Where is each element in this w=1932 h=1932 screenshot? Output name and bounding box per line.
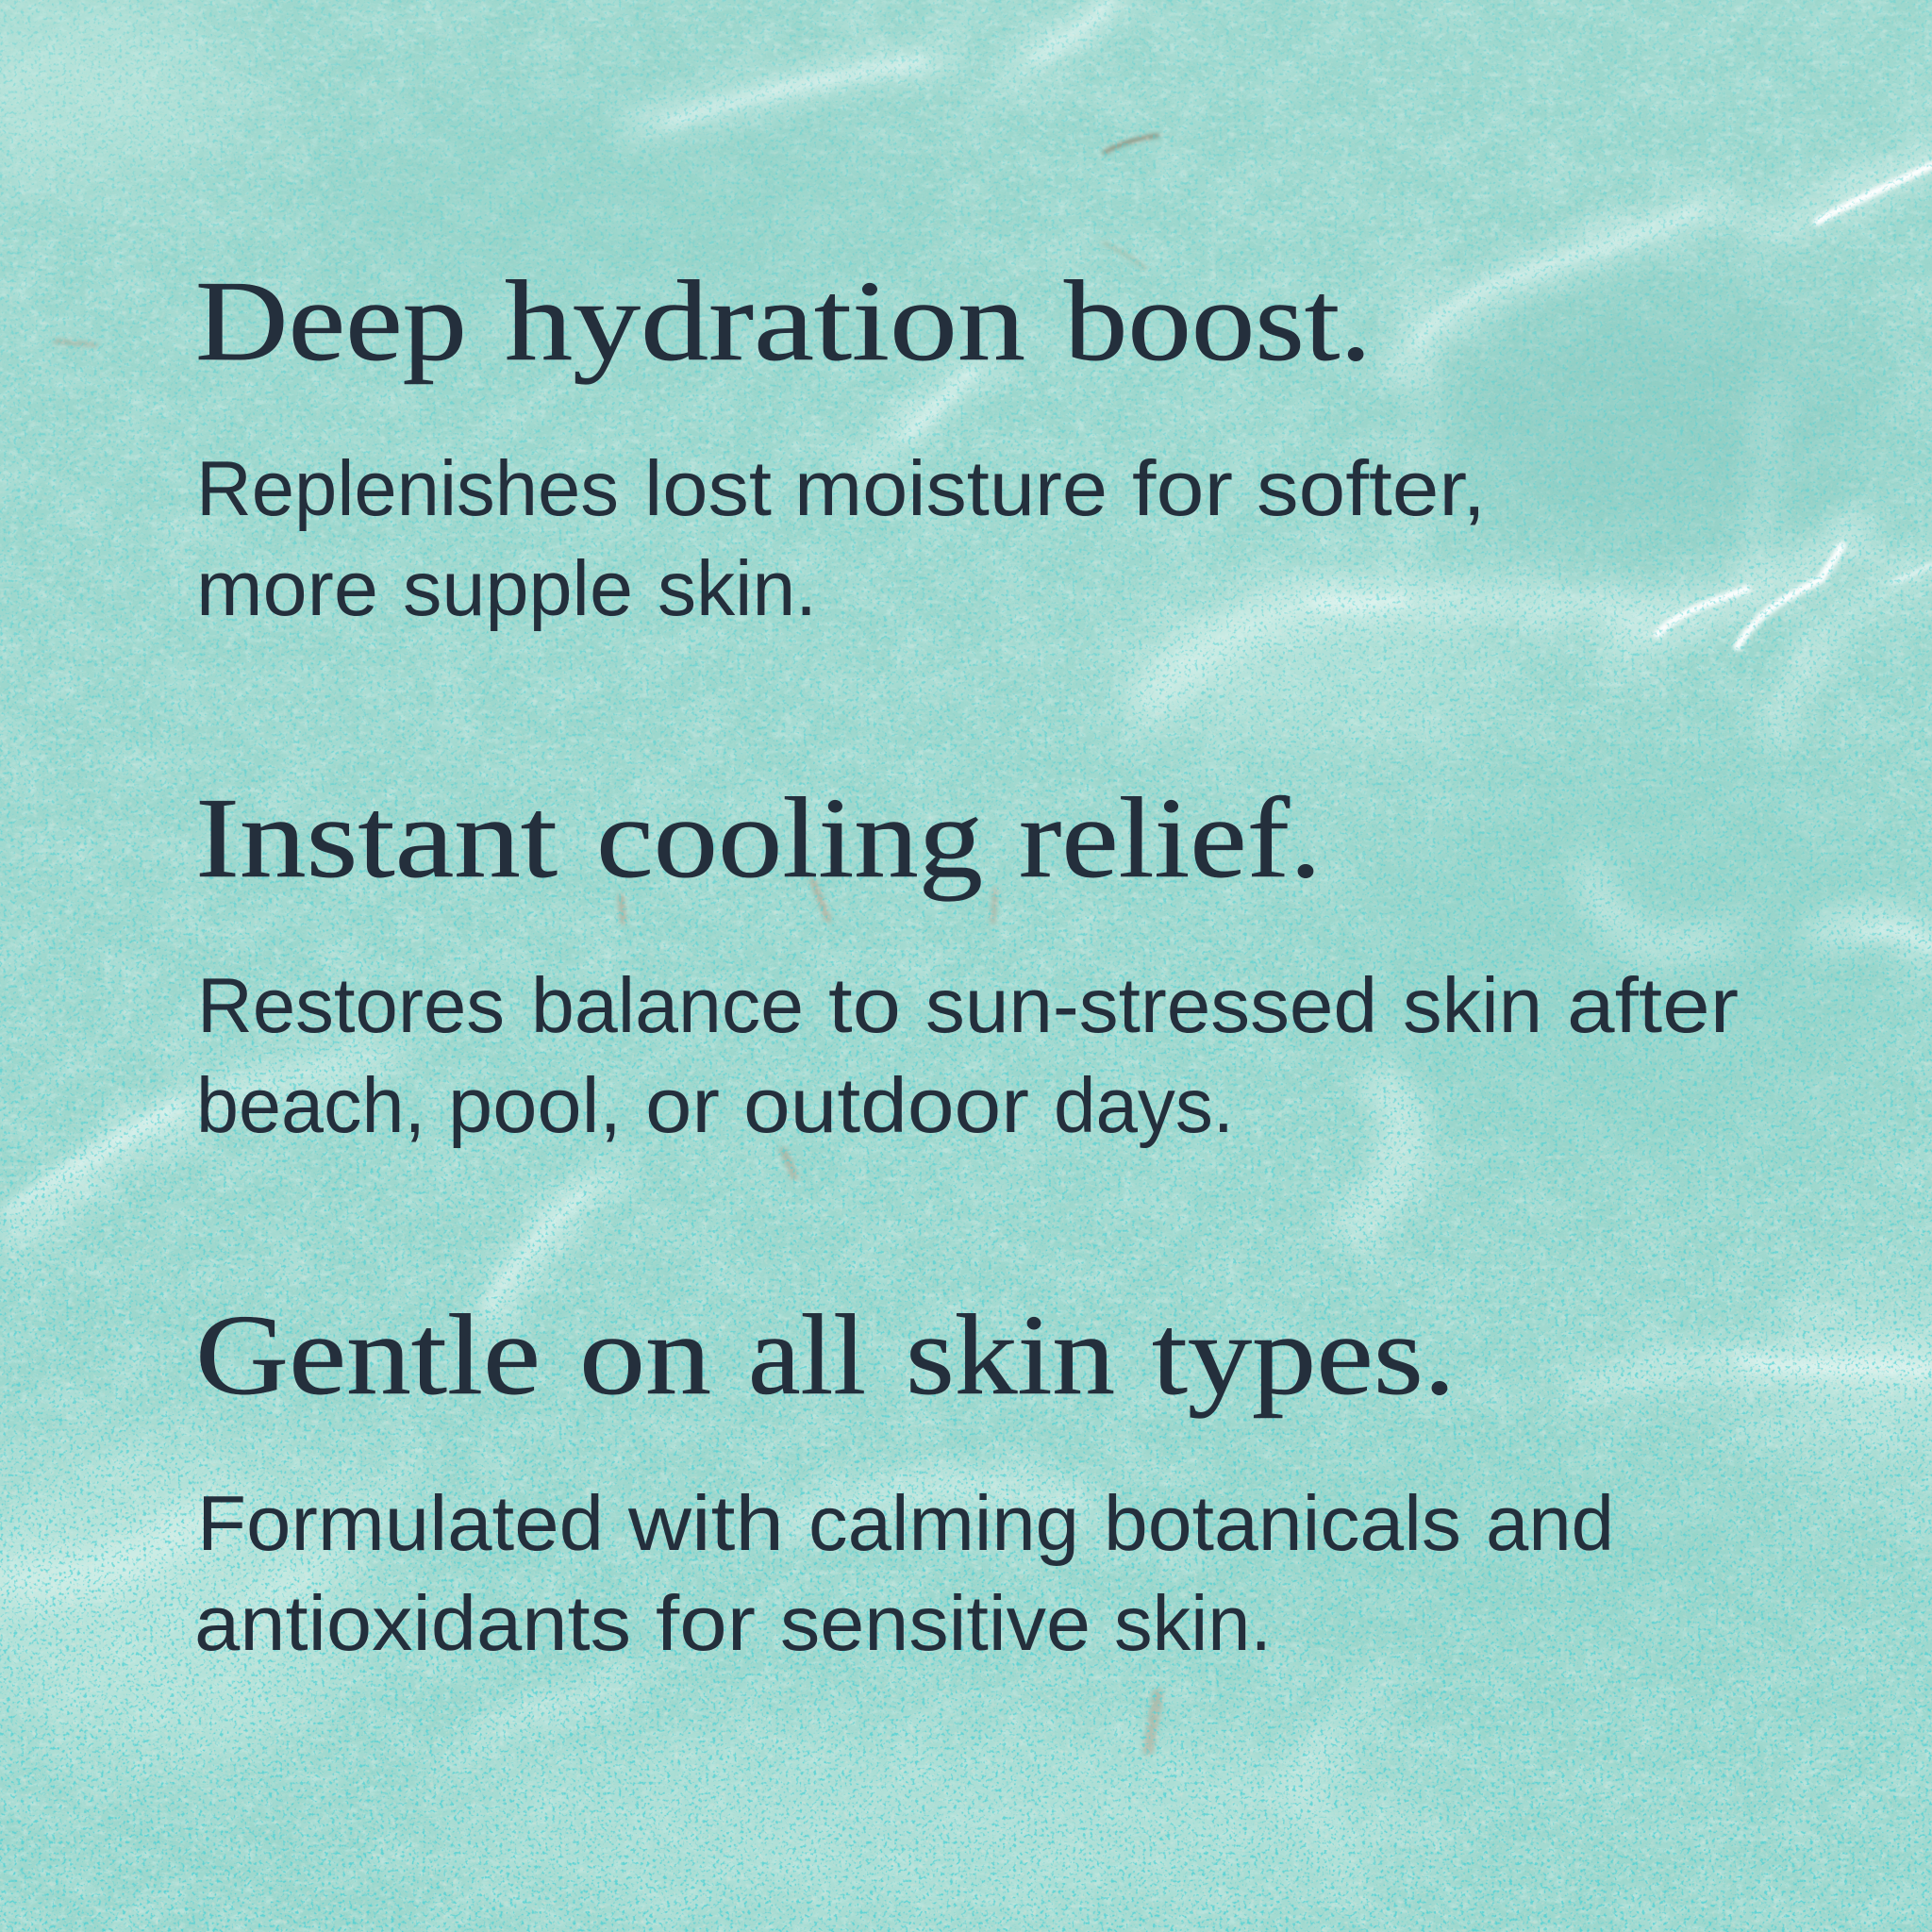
body text: hydration: moisture <box>794 444 1108 532</box>
body text: cooling: pool, <box>448 1061 622 1149</box>
heading: Gentle on all skin types: Gentle <box>195 1291 541 1419</box>
body text: gentle: and <box>1486 1479 1614 1567</box>
heading: Gentle on all skin types: skin <box>906 1291 1115 1419</box>
body text: cooling: to <box>828 961 901 1049</box>
body text: gentle: calming <box>808 1479 1079 1567</box>
body text: gentle: antioxidants <box>194 1579 631 1667</box>
body text: hydration: for <box>1132 444 1233 532</box>
body text: hydration: lost <box>644 444 772 532</box>
body text: cooling: days. <box>1054 1061 1234 1149</box>
heading: Gentle on all skin types: types. <box>1152 1291 1456 1419</box>
body text: hydration: Replenishes <box>196 444 619 532</box>
benefit 1: deep hydration <box>195 258 1486 632</box>
benefit 2: instant cooling <box>195 774 1739 1149</box>
body text: gentle: sensitive <box>780 1579 1091 1667</box>
body text: gentle: for <box>656 1579 756 1667</box>
body text: cooling: balance <box>531 961 804 1049</box>
body text: cooling: outdoor <box>743 1061 1029 1149</box>
body text: hydration: more <box>196 544 378 632</box>
heading: Instant cooling relief: relief. <box>1019 774 1322 902</box>
body text: cooling: after <box>1567 961 1739 1049</box>
body text: hydration <box>196 444 1486 632</box>
body text: cooling: beach, <box>196 1061 425 1149</box>
body text: cooling: skin <box>1403 961 1542 1049</box>
body text: cooling: sun-stressed <box>925 961 1377 1049</box>
body text: hydration: softer, <box>1257 444 1486 532</box>
body text: gentle: with <box>627 1479 784 1567</box>
benefit 3: gentle on all skin types <box>194 1291 1614 1667</box>
body text: gentle: Formulated <box>197 1479 604 1567</box>
body text: hydration: skin. <box>658 544 817 632</box>
body text: cooling <box>196 961 1739 1149</box>
body text: gentle <box>194 1479 1614 1667</box>
heading: Deep hydration boost: hydration <box>505 258 1025 385</box>
heading: Instant cooling relief: Instant <box>195 774 558 902</box>
heading: Gentle on all skin types: on <box>579 1291 711 1419</box>
body text: cooling: Restores <box>197 961 505 1049</box>
heading: Deep hydration boost: boost. <box>1064 258 1372 385</box>
body text: hydration: supple <box>403 544 633 632</box>
heading: Gentle on all skin types: all <box>748 1291 866 1419</box>
heading: Instant cooling relief: cooling <box>596 774 983 902</box>
body text: cooling: or <box>645 1061 720 1149</box>
body text: gentle: skin. <box>1114 1579 1272 1667</box>
heading: Deep hydration boost: Deep <box>195 258 467 385</box>
body text: gentle: botanicals <box>1104 1479 1461 1567</box>
